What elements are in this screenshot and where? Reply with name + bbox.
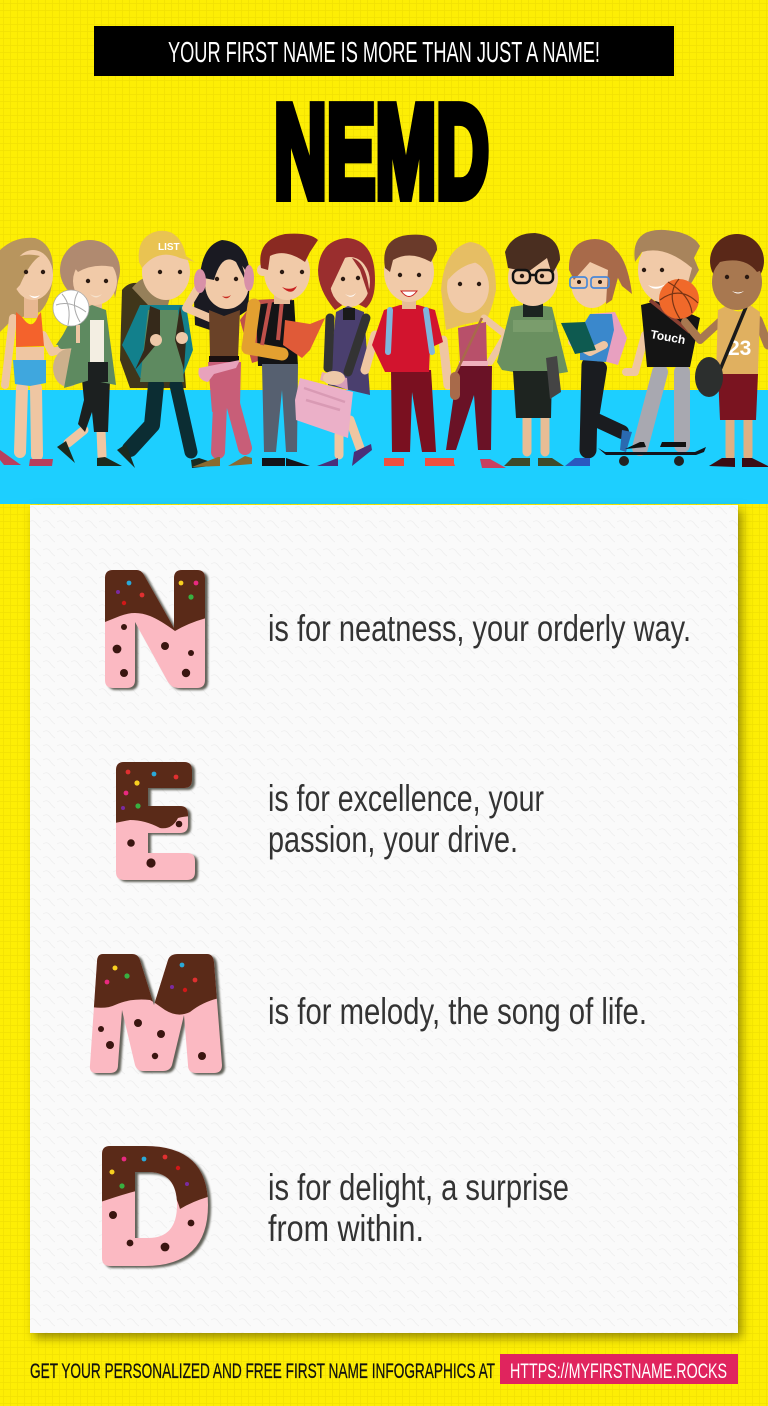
- person 12: guy in yellow basketball tank: 23: [728, 337, 751, 360]
- icon: candy letter D: [102, 1146, 212, 1270]
- person 5: guy reading a book: [240, 234, 325, 466]
- icon: candy letter E: [116, 762, 200, 884]
- icon: candy letter N: [105, 570, 210, 692]
- person 1: girl in orange top: [0, 238, 76, 466]
- person 12: guy in yellow basketball tank: [695, 234, 768, 467]
- text: D meaning: is for delight, a surprise: [268, 1167, 569, 1208]
- text: M meaning: is for melody, the song of life.: [268, 991, 647, 1032]
- person 11: skateboarder with basketball: Touch: [649, 327, 686, 347]
- person 9: guy with glasses and binder: [497, 233, 568, 466]
- person 2: girl with volleyball: [53, 240, 122, 466]
- white content panel: [30, 505, 738, 1333]
- person 6: girl with pink case: [295, 238, 375, 466]
- text: E meaning: is for excellence, your: [268, 778, 544, 819]
- person 7: smiling guy in red tee: [365, 235, 454, 466]
- icon: candy letter M: [85, 945, 225, 1078]
- row: letter D: [95, 1140, 569, 1270]
- row: letter E: [110, 755, 544, 884]
- text: E meaning: passion, your drive.: [268, 819, 518, 860]
- text: D meaning: from within.: [268, 1208, 424, 1249]
- person 3: hiker with backpack and cap: [117, 231, 220, 468]
- footer call to action: GET YOUR PERSONALIZED AND FREE FIRST NAME INFOGRAPHICS AT: [30, 1360, 495, 1383]
- person 10: girl with ponytail and tablet: [561, 239, 632, 466]
- row: letter N: [105, 570, 688, 692]
- person 8: blonde girl: [425, 242, 506, 468]
- text: D meaning: [268, 1167, 569, 1249]
- top banner: tagline: [94, 26, 674, 76]
- text: E meaning: [268, 778, 544, 860]
- crowd of twelve students: [0, 230, 768, 468]
- row: letter M: [85, 945, 647, 1078]
- footer link badge: [500, 1354, 738, 1384]
- person 3: hiker with backpack and cap: LIST: [158, 242, 180, 253]
- title: name: NEMD: [274, 78, 489, 225]
- person 11: skateboarder with basketball: [598, 230, 724, 466]
- person 4: girl with headphones: [186, 240, 254, 467]
- cyan floor band: [0, 390, 768, 504]
